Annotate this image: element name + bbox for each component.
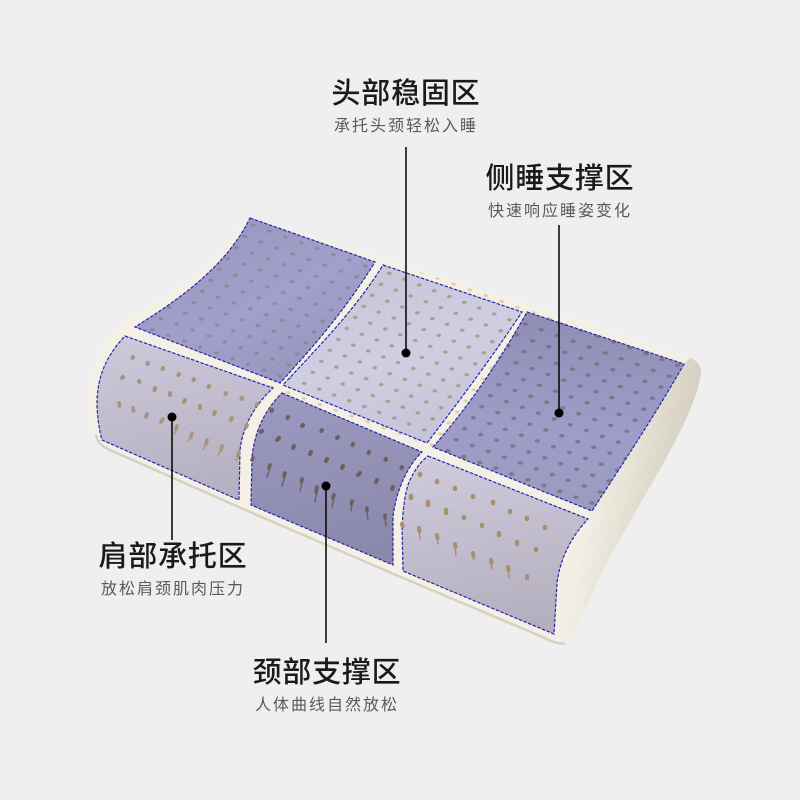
panel: neck support zone [251,393,422,565]
leader line: side sleep zone [554,225,564,418]
callout: head stabilising zone: 头部稳固区 [331,78,480,110]
callout: shoulder support zone [98,541,248,598]
panel: front right zone [402,456,588,634]
callout: shoulder support zone: 肩部承托区 [98,541,248,573]
pillow body [88,217,701,643]
callout: side sleep support zone: 侧睡支撑区 [485,163,634,195]
panel: side sleep support zone [433,312,684,511]
leader line: neck zone [322,482,330,643]
callout: side sleep support zone: 快速响应睡姿变化 [488,203,632,220]
panel: shoulder support zone [97,336,273,500]
callout: side sleep support zone [485,163,634,220]
panel: head stabilising zone [283,265,522,443]
callout: head stabilising zone [331,78,480,135]
callout: neck support zone [252,657,402,714]
leader line: head zone [402,147,410,358]
callout: head stabilising zone: 承托头颈轻松入睡 [334,118,478,135]
leader line: shoulder zone [168,412,176,540]
callout: neck support zone: 颈部支撑区 [252,657,402,689]
callout: neck support zone: 人体曲线自然放松 [255,697,399,714]
callout: shoulder support zone: 放松肩颈肌肉压力 [101,581,245,598]
panel: rear left zone [135,218,375,383]
